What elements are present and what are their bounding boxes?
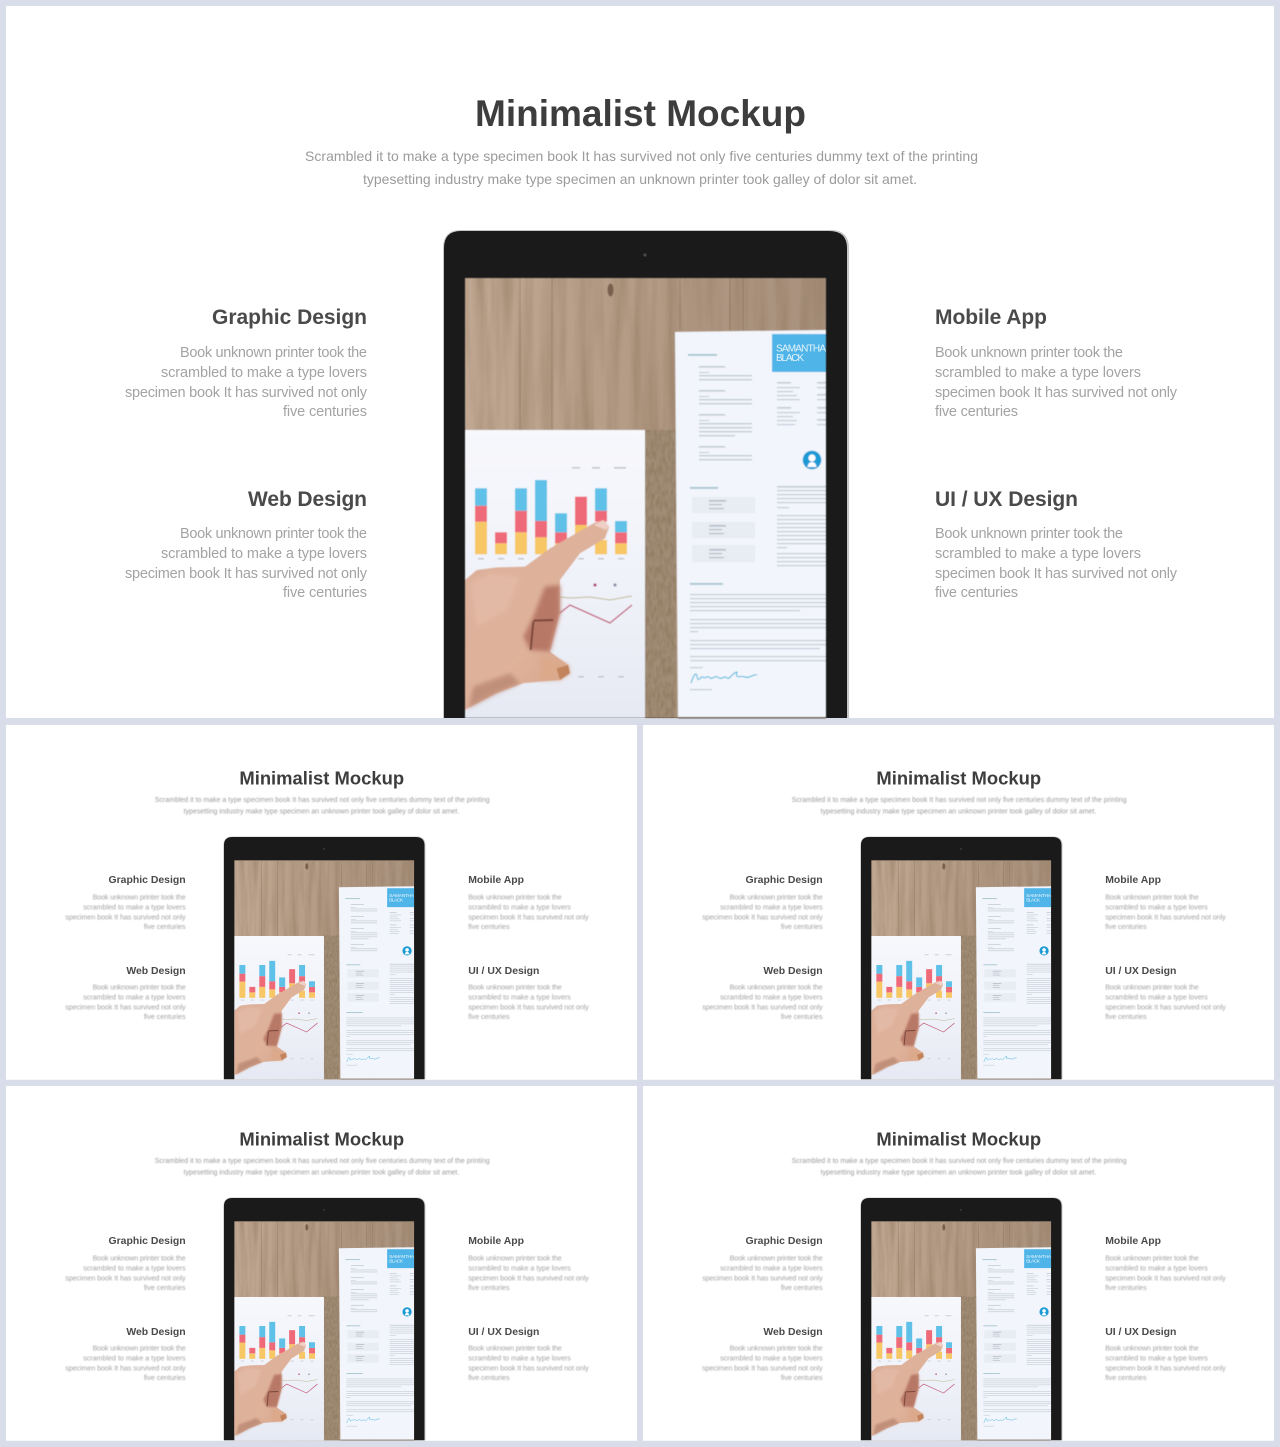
- feature: Mobile App: Book unknown printer took the: [468, 893, 562, 902]
- feature: UI / UX Design: [1105, 1327, 1226, 1382]
- feature: Web Design: specimen book It has survived not only: [702, 1003, 823, 1012]
- feature: Mobile App: scrambled to make a type lovers: [1105, 903, 1208, 912]
- tablet mockup: [860, 1197, 1062, 1441]
- feature: UI / UX Design: specimen book It has survived not only: [935, 566, 1178, 582]
- feature: Graphic Design: specimen book It has survived not only: [65, 1274, 186, 1283]
- subtitle: Scrambled it to make a type specimen book It has survived not only five centuries dummy text of the printing: [792, 1158, 1127, 1165]
- feature: Web Design: scrambled to make a type lovers: [720, 993, 823, 1002]
- tablet mockup: SAMANTHA: [389, 893, 415, 899]
- feature: Web Design: [702, 1327, 823, 1382]
- feature: Graphic Design: scrambled to make a type lovers: [720, 1264, 823, 1273]
- subtitle: [155, 1158, 490, 1177]
- feature: UI / UX Design: specimen book It has survived not only: [1105, 1003, 1226, 1012]
- feature: UI / UX Design: UI / UX Design: [1105, 966, 1176, 977]
- feature: Graphic Design: specimen book It has survived not only: [125, 385, 368, 401]
- feature: Graphic Design: Graphic Design: [746, 875, 823, 886]
- feature: Mobile App: specimen book It has survived not only: [1105, 913, 1226, 922]
- tablet mockup: BLACK: [776, 353, 804, 364]
- feature: Mobile App: scrambled to make a type lovers: [935, 365, 1141, 381]
- feature: Graphic Design: five centuries: [781, 922, 823, 931]
- feature: UI / UX Design: five centuries: [468, 1012, 510, 1021]
- feature: Mobile App: scrambled to make a type lovers: [468, 903, 571, 912]
- subtitle: typesetting industry make type specimen an unknown printer took galley of dolor sit amet.: [821, 809, 1096, 816]
- feature: Graphic Design: Book unknown printer took the: [730, 1254, 823, 1263]
- tablet mockup: [223, 1197, 425, 1441]
- panel: small slide bottom left: [6, 1086, 637, 1441]
- feature: Graphic Design: Graphic Design: [212, 306, 367, 329]
- feature: Web Design: Web Design: [763, 966, 823, 977]
- feature: Mobile App: five centuries: [1105, 1283, 1147, 1292]
- feature: Web Design: scrambled to make a type lovers: [83, 1354, 186, 1363]
- feature: UI / UX Design: specimen book It has survived not only: [1105, 1364, 1226, 1373]
- tablet mockup: SAMANTHA: [1026, 893, 1052, 899]
- feature: Mobile App: scrambled to make a type lovers: [1105, 1264, 1208, 1273]
- tablet mockup: BLACK: [1026, 898, 1041, 904]
- feature: Web Design: Web Design: [763, 1327, 823, 1338]
- feature: Web Design: [702, 966, 823, 1021]
- title: Minimalist Mockup: [876, 1129, 1041, 1150]
- feature: Mobile App: [468, 1236, 589, 1292]
- feature: UI / UX Design: [935, 488, 1178, 601]
- feature: Mobile App: Mobile App: [1105, 1236, 1161, 1247]
- feature: Graphic Design: [65, 875, 186, 931]
- feature: Graphic Design: five centuries: [144, 922, 186, 931]
- feature: Mobile App: Book unknown printer took the: [1105, 1254, 1199, 1263]
- feature: Mobile App: [1105, 1236, 1226, 1292]
- feature: UI / UX Design: Book unknown printer took the: [1105, 1344, 1199, 1353]
- feature: UI / UX Design: five centuries: [1105, 1373, 1147, 1382]
- feature: Graphic Design: Graphic Design: [109, 1236, 186, 1247]
- feature: Web Design: Book unknown printer took the: [93, 1344, 186, 1353]
- subtitle: Scrambled it to make a type specimen book It has survived not only five centuries dummy text of the printing: [305, 148, 978, 164]
- feature: Mobile App: five centuries: [468, 1283, 510, 1292]
- title: Minimalist Mockup: [475, 93, 806, 134]
- subtitle: Scrambled it to make a type specimen book It has survived not only five centuries dummy text of the printing: [792, 797, 1127, 804]
- tablet mockup: BLACK: [389, 898, 404, 904]
- feature: Web Design: scrambled to make a type lovers: [720, 1354, 823, 1363]
- feature: Graphic Design: Graphic Design: [109, 875, 186, 886]
- feature: UI / UX Design: five centuries: [935, 585, 1018, 601]
- feature: Web Design: specimen book It has survived not only: [65, 1364, 186, 1373]
- feature: Mobile App: scrambled to make a type lovers: [468, 1264, 571, 1273]
- feature: Web Design: scrambled to make a type lovers: [83, 993, 186, 1002]
- feature: UI / UX Design: scrambled to make a type lovers: [1105, 993, 1208, 1002]
- feature: Graphic Design: Graphic Design: [746, 1236, 823, 1247]
- feature: Graphic Design: scrambled to make a type lovers: [83, 1264, 186, 1273]
- feature: Web Design: five centuries: [144, 1373, 186, 1382]
- feature: Web Design: Web Design: [126, 966, 186, 977]
- feature: Web Design: Book unknown printer took the: [730, 1344, 823, 1353]
- feature: Mobile App: five centuries: [1105, 922, 1147, 931]
- tablet mockup: SAMANTHA: [776, 344, 826, 354]
- feature: Web Design: [65, 1327, 186, 1382]
- feature: UI / UX Design: UI / UX Design: [468, 1327, 539, 1338]
- feature: Web Design: specimen book It has survived not only: [702, 1364, 823, 1373]
- feature: Graphic Design: scrambled to make a type lovers: [161, 365, 367, 381]
- panel: large slide: [6, 6, 1274, 718]
- subtitle: [792, 797, 1127, 816]
- panel: small slide bottom right: [643, 1086, 1274, 1441]
- feature: Web Design: Web Design: [126, 1327, 186, 1338]
- feature: Graphic Design: Book unknown printer took the: [93, 1254, 186, 1263]
- feature: UI / UX Design: scrambled to make a type lovers: [935, 546, 1141, 562]
- tablet mockup: [443, 230, 849, 718]
- subtitle: Scrambled it to make a type specimen book It has survived not only five centuries dummy text of the printing: [155, 797, 490, 804]
- tablet mockup: SAMANTHA: [1026, 1254, 1052, 1260]
- subtitle: typesetting industry make type specimen an unknown printer took galley of dolor sit amet.: [184, 1170, 459, 1177]
- feature: Mobile App: specimen book It has survived not only: [468, 1274, 589, 1283]
- feature: Graphic Design: five centuries: [283, 404, 367, 420]
- feature: Graphic Design: five centuries: [781, 1283, 823, 1292]
- feature: Web Design: specimen book It has survived not only: [125, 566, 368, 582]
- tablet mockup: [223, 836, 425, 1080]
- feature: UI / UX Design: scrambled to make a type lovers: [468, 993, 571, 1002]
- feature: Graphic Design: specimen book It has survived not only: [65, 913, 186, 922]
- feature: Web Design: five centuries: [144, 1012, 186, 1021]
- subtitle: Scrambled it to make a type specimen book It has survived not only five centuries dummy text of the printing: [155, 1158, 490, 1165]
- title: Minimalist Mockup: [876, 768, 1041, 789]
- feature: Web Design: scrambled to make a type lovers: [161, 546, 367, 562]
- feature: Mobile App: Mobile App: [1105, 875, 1161, 886]
- feature: Graphic Design: [125, 306, 368, 420]
- feature: UI / UX Design: UI / UX Design: [935, 488, 1078, 511]
- feature: Graphic Design: Book unknown printer took the: [93, 893, 186, 902]
- feature: UI / UX Design: scrambled to make a type lovers: [1105, 1354, 1208, 1363]
- feature: UI / UX Design: specimen book It has survived not only: [468, 1364, 589, 1373]
- title: Minimalist Mockup: [239, 1129, 404, 1150]
- feature: UI / UX Design: five centuries: [468, 1373, 510, 1382]
- tablet mockup: BLACK: [389, 1259, 404, 1265]
- feature: UI / UX Design: Book unknown printer took the: [468, 983, 562, 992]
- feature: UI / UX Design: scrambled to make a type lovers: [468, 1354, 571, 1363]
- feature: Web Design: Web Design: [248, 488, 367, 511]
- subtitle: typesetting industry make type specimen an unknown printer took galley of dolor sit amet.: [821, 1170, 1096, 1177]
- subtitle: [305, 148, 978, 187]
- feature: Mobile App: Mobile App: [935, 306, 1047, 329]
- feature: UI / UX Design: Book unknown printer took the: [468, 1344, 562, 1353]
- feature: UI / UX Design: five centuries: [1105, 1012, 1147, 1021]
- feature: Mobile App: [1105, 875, 1226, 931]
- tablet mockup: SAMANTHA: [389, 1254, 415, 1260]
- feature: Graphic Design: Book unknown printer took the: [730, 893, 823, 902]
- panel: small slide top left: [6, 725, 637, 1080]
- subtitle: [792, 1158, 1127, 1177]
- subtitle: typesetting industry make type specimen an unknown printer took galley of dolor sit amet.: [363, 171, 917, 187]
- feature: UI / UX Design: Book unknown printer took the: [1105, 983, 1199, 992]
- feature: Graphic Design: specimen book It has survived not only: [702, 1274, 823, 1283]
- feature: Web Design: specimen book It has survived not only: [65, 1003, 186, 1012]
- feature: Graphic Design: [702, 875, 823, 931]
- feature: Mobile App: Mobile App: [468, 1236, 524, 1247]
- feature: Mobile App: Book unknown printer took the: [468, 1254, 562, 1263]
- feature: Web Design: [125, 488, 368, 601]
- feature: Graphic Design: Book unknown printer took the: [180, 345, 367, 361]
- feature: Web Design: [65, 966, 186, 1021]
- feature: Web Design: five centuries: [283, 585, 367, 601]
- feature: Graphic Design: five centuries: [144, 1283, 186, 1292]
- feature: Mobile App: specimen book It has survived not only: [935, 385, 1178, 401]
- feature: UI / UX Design: UI / UX Design: [1105, 1327, 1176, 1338]
- feature: Mobile App: five centuries: [935, 404, 1018, 420]
- feature: Web Design: Book unknown printer took the: [180, 526, 367, 542]
- feature: UI / UX Design: UI / UX Design: [468, 966, 539, 977]
- feature: Mobile App: [468, 875, 589, 931]
- panel: small slide top right: [643, 725, 1274, 1080]
- feature: Graphic Design: specimen book It has survived not only: [702, 913, 823, 922]
- feature: Mobile App: Book unknown printer took the: [935, 345, 1123, 361]
- feature: Mobile App: Mobile App: [468, 875, 524, 886]
- tablet mockup: BLACK: [1026, 1259, 1041, 1265]
- feature: UI / UX Design: [1105, 966, 1226, 1021]
- subtitle: typesetting industry make type specimen an unknown printer took galley of dolor sit amet.: [184, 809, 459, 816]
- title: Minimalist Mockup: [239, 768, 404, 789]
- feature: UI / UX Design: [468, 1327, 589, 1382]
- tablet mockup: [860, 836, 1062, 1080]
- feature: Web Design: Book unknown printer took the: [93, 983, 186, 992]
- feature: Graphic Design: [65, 1236, 186, 1292]
- feature: Mobile App: Book unknown printer took the: [1105, 893, 1199, 902]
- feature: Mobile App: five centuries: [468, 922, 510, 931]
- feature: Graphic Design: scrambled to make a type lovers: [720, 903, 823, 912]
- subtitle: [155, 797, 490, 816]
- feature: Mobile App: specimen book It has survived not only: [468, 913, 589, 922]
- feature: UI / UX Design: [468, 966, 589, 1021]
- feature: UI / UX Design: specimen book It has survived not only: [468, 1003, 589, 1012]
- feature: Mobile App: [935, 306, 1178, 420]
- feature: UI / UX Design: Book unknown printer took the: [935, 526, 1123, 542]
- feature: Mobile App: specimen book It has survived not only: [1105, 1274, 1226, 1283]
- feature: Web Design: Book unknown printer took the: [730, 983, 823, 992]
- feature: Graphic Design: [702, 1236, 823, 1292]
- feature: Web Design: five centuries: [781, 1012, 823, 1021]
- feature: Graphic Design: scrambled to make a type lovers: [83, 903, 186, 912]
- feature: Web Design: five centuries: [781, 1373, 823, 1382]
